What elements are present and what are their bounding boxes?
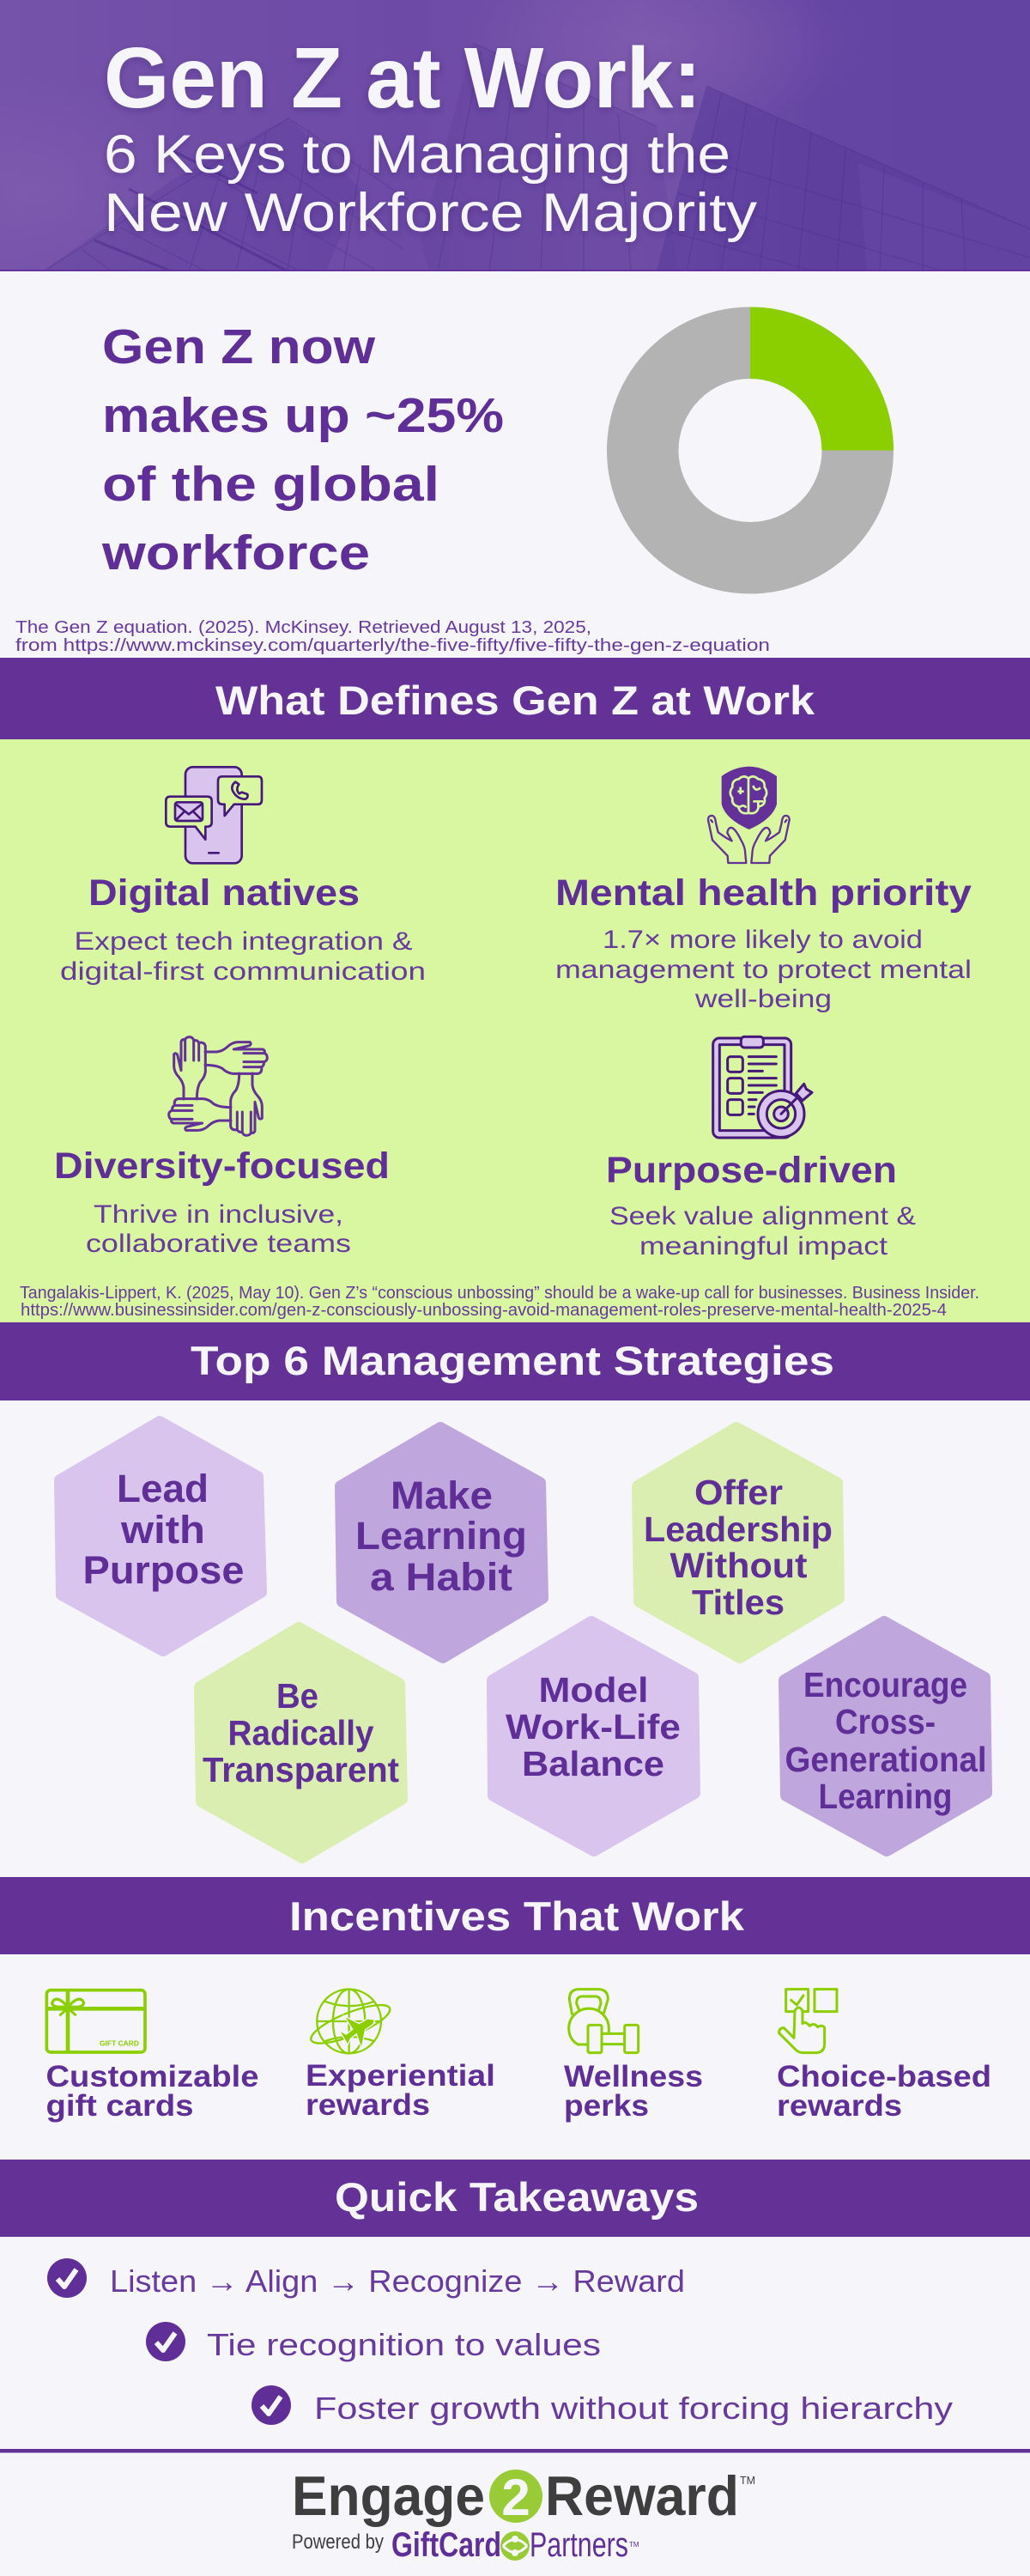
text block: Diversity-focused: collaborative teams — [86, 1230, 351, 1258]
section band: Top 6 Management Strategies: Top 6 Management Strategies — [191, 1338, 834, 1383]
section band: Top 6 Management Strategies — [0, 1322, 1030, 1400]
text block: Digital natives: Digital natives — [88, 872, 360, 914]
hexagon: Encourage Cross-Generational Learning: Generational — [785, 1740, 987, 1779]
text block: Purpose-driven: meaningful impact — [639, 1232, 888, 1261]
hexagon: Offer Leadership Without Titles: Leadership — [644, 1510, 833, 1549]
title: New Workforce Majority — [104, 183, 758, 243]
logo: Engage2Reward powered by GiftCard Partners: 2 — [501, 2469, 530, 2526]
hexagon: Make Learning a Habit — [341, 1428, 542, 1657]
section band: Quick Takeaways: Quick Takeaways — [335, 2174, 699, 2220]
hexagon: Make Learning a Habit: a Habit — [370, 1555, 512, 1599]
logo: Engage2Reward powered by GiftCard Partners: TM — [629, 2541, 639, 2549]
icon: globe with plane — [307, 1990, 394, 2053]
citation: McKinsey: from https://www.mckinsey.com/quarterly/the-five-fifty/five-fifty-the-gen-z-equation — [15, 635, 770, 655]
text block: Purpose-driven: Seek value alignment & — [609, 1202, 916, 1230]
icon: checklist with target — [713, 1036, 812, 1138]
citation: Business Insider: https://www.businessinsider.com/gen-z-consciously-unbossing-avoid-management-roles-preserve-mental-health-2025-4 — [21, 1300, 947, 1320]
logo: Engage2Reward powered by GiftCard Partners: GiftCard — [391, 2526, 501, 2564]
hexagon: Lead with Purpose: with — [120, 1508, 205, 1552]
text block: Digital natives — [60, 872, 426, 986]
text block: Mental health priority: 1.7× more likely to avoid — [603, 926, 923, 954]
text block: Diversity-focused: Diversity-focused — [54, 1145, 390, 1187]
hexagon: Model Work-Life Balance: Model — [539, 1670, 649, 1710]
icon: gift card: GIFT CARD — [100, 2040, 139, 2048]
hexagon: Offer Leadership Without Titles: Offer — [694, 1473, 783, 1512]
citation: McKinsey — [15, 617, 770, 655]
section band: Incentives That Work: Incentives That Work — [289, 1893, 745, 1939]
title: 6 Keys to Managing the — [104, 125, 730, 185]
takeaway: foster growth: Foster growth without forcing hierarchy — [314, 2391, 953, 2426]
text block: Digital natives: digital-first communication — [60, 957, 426, 986]
stat headline — [101, 319, 504, 580]
incentive labels — [46, 2059, 991, 2123]
logo: Engage2Reward powered by GiftCard Partners: TM — [740, 2474, 755, 2487]
logo: Engage2Reward powered by GiftCard Partners: Powered by — [292, 2530, 384, 2554]
incentive labels: Choice-based — [777, 2060, 991, 2093]
hexagon: Offer Leadership Without Titles: Without — [670, 1546, 808, 1585]
incentive labels: perks — [564, 2089, 649, 2123]
takeaway: listen align recognize reward: Listen → Align → Recognize → Reward — [110, 2263, 685, 2299]
hexagon: Be Radically Transparent: Be — [276, 1676, 318, 1716]
title: Gen Z at Work: — [104, 30, 701, 126]
takeaway: tie recognition to values: Tie recognition to values — [207, 2327, 601, 2362]
hexagon: Encourage Cross-Generational Learning: Encourage — [803, 1665, 967, 1704]
section band: What Defines Gen Z at Work — [0, 658, 1030, 739]
text block: Purpose-driven — [606, 1150, 916, 1261]
text block: Digital natives: Expect tech integration & — [74, 927, 412, 956]
citation: Business Insider: Tangalakis-Lippert, K. (2025, May 10). Gen Z’s “conscious unbossing” should be a wake-up call for businesses. Business Insider. — [20, 1283, 979, 1303]
section band: Incentives That Work — [0, 1877, 1030, 1954]
icon: kettlebell and dumbbell — [569, 1990, 639, 2053]
hexagon: Be Radically Transparent — [200, 1628, 402, 1857]
stat headline: of the global — [102, 457, 439, 512]
text block: Mental health priority: well-being — [694, 985, 832, 1013]
logo: Engage2Reward powered by GiftCard Partners: Engage — [292, 2464, 485, 2527]
incentive labels: rewards — [306, 2088, 430, 2122]
hexagon: Be Radically Transparent: Transparent — [203, 1750, 399, 1789]
section band: What Defines Gen Z at Work: What Defines Gen Z at Work — [215, 677, 815, 723]
incentive labels: gift cards — [46, 2089, 194, 2123]
logo: Engage2Reward powered by GiftCard Partners: Reward — [545, 2464, 739, 2527]
hexagon: Lead with Purpose — [60, 1422, 261, 1650]
takeaway: tie recognition to values — [146, 2322, 601, 2362]
text block: Mental health priority — [555, 872, 972, 1013]
hexagon: Be Radically Transparent: Radically — [228, 1713, 374, 1753]
donut chart — [643, 307, 894, 558]
text block: Mental health priority: management to protect mental — [555, 956, 972, 984]
hexagon: Model Work-Life Balance — [493, 1622, 694, 1850]
icon: phone with message bubbles — [166, 767, 262, 863]
citation: McKinsey: The Gen Z equation. (2025). McKinsey. Retrieved August 13, 2025, — [15, 617, 591, 637]
incentive labels: rewards — [777, 2089, 902, 2123]
hexagon: Make Learning a Habit: Learning — [355, 1514, 527, 1558]
icon: brain shield in hands — [708, 767, 790, 863]
icon: hand choosing checkbox — [779, 1990, 837, 2053]
hexagon: Make Learning a Habit: Make — [391, 1473, 493, 1517]
section band: Quick Takeaways — [0, 2160, 1030, 2237]
icon: gift card — [46, 1990, 145, 2052]
stat headline: workforce — [101, 526, 370, 580]
text block: Mental health priority: Mental health priority — [555, 872, 972, 914]
hexagon: Offer Leadership Without Titles: Titles — [692, 1583, 785, 1622]
incentive labels: Wellness — [564, 2060, 703, 2093]
icon: four interlocking hands — [169, 1037, 267, 1135]
hexagon: Encourage Cross-Generational Learning: Learning — [819, 1777, 953, 1816]
hexagon: Offer Leadership Without Titles — [638, 1428, 839, 1657]
stat headline: Gen Z now — [102, 319, 376, 374]
logo: Engage2Reward powered by GiftCard Partners — [292, 2464, 755, 2564]
hexagon: Model Work-Life Balance: Work-Life — [506, 1707, 681, 1747]
text block: Purpose-driven: Purpose-driven — [606, 1150, 897, 1191]
panel: what defines Gen Z — [0, 739, 1030, 1322]
title — [104, 30, 758, 243]
hexagon: Encourage Cross-Generational Learning — [785, 1622, 987, 1850]
hexagon: Lead with Purpose: Lead — [117, 1467, 209, 1510]
logo: Engage2Reward powered by GiftCard Partners: Partners — [530, 2526, 628, 2564]
stat headline: makes up ~25% — [102, 388, 504, 443]
takeaway: foster growth — [251, 2385, 953, 2426]
text block: Diversity-focused — [54, 1145, 390, 1258]
incentive labels: Customizable — [46, 2060, 259, 2093]
citation: Business Insider — [20, 1283, 979, 1320]
hexagon: Encourage Cross-Generational Learning: Cross- — [835, 1702, 936, 1741]
hexagon: Model Work-Life Balance: Balance — [522, 1744, 664, 1783]
incentive labels: Experiential — [306, 2059, 495, 2093]
header banner — [0, 0, 1030, 301]
text block: Diversity-focused: Thrive in inclusive, — [94, 1200, 343, 1229]
hexagon: Lead with Purpose: Purpose — [82, 1548, 244, 1592]
